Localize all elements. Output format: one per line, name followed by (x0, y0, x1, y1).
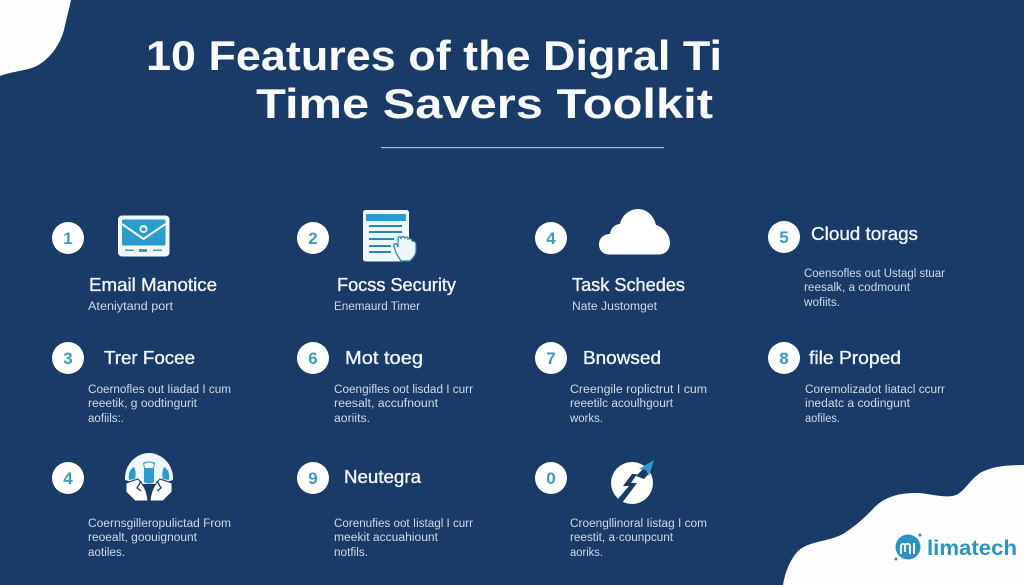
number badge 9 (297, 462, 329, 494)
number badge 1: 1 (63, 229, 73, 248)
number badge 6 (297, 342, 329, 374)
heading: Email Manotice (89, 275, 217, 295)
description: aoriits. (334, 413, 370, 425)
description: reesalt, accufnount (334, 398, 439, 410)
icon: hands around device (125, 453, 173, 501)
description: aofiles. (805, 413, 840, 425)
description: Coengifles oot lisdad I curr (334, 384, 473, 396)
description (334, 384, 473, 425)
title: Time Savers Toolkit (256, 80, 713, 127)
feature: Bnowsed (535, 342, 707, 425)
description: Corenufies oot Iistagl I curr (334, 518, 473, 530)
number badge 3 (52, 342, 84, 374)
number badge 4: 4 (546, 229, 556, 248)
description: notfils. (334, 547, 368, 559)
description (334, 518, 473, 559)
icon: email (118, 216, 170, 256)
icon: document with hand cursor (363, 210, 416, 262)
number badge 3: 3 (63, 349, 73, 368)
number badge 8: 8 (779, 349, 789, 368)
title (146, 32, 722, 127)
number badge 6: 6 (308, 349, 318, 368)
number badge 7: 7 (546, 349, 556, 368)
cloud: bottom right corner (783, 465, 1024, 585)
description: works. (569, 413, 603, 425)
cloud: top left corner (0, 0, 71, 76)
description (88, 384, 231, 425)
heading: Mot toeg (345, 348, 423, 368)
description: reesalk, a codmount (804, 282, 911, 294)
title: 10 Features of the Digral Ti (146, 32, 722, 79)
description: Nate Justomget (572, 301, 658, 313)
heading: Focss Security (337, 275, 456, 295)
number badge 0 (535, 462, 567, 494)
description: meekit accuahiount (334, 532, 439, 544)
number badge 8 (768, 342, 800, 374)
title divider (381, 147, 664, 148)
description (88, 518, 231, 559)
feature: second number 4 (52, 453, 231, 559)
description: Creengile roplictrut I cum (570, 384, 707, 396)
number badge 4: 4 (63, 469, 73, 488)
heading: file Proped (809, 348, 901, 368)
logo mark (894, 534, 922, 560)
description: inedatc a codingunt (805, 398, 911, 410)
icon: cloud (599, 209, 670, 254)
number badge 2 (297, 222, 329, 254)
number badge 9: 9 (308, 469, 318, 488)
heading: Bnowsed (583, 348, 661, 368)
description: aoriks. (570, 547, 603, 559)
description: aofiils:. (88, 413, 124, 425)
description: Enemaurd Timer (334, 301, 420, 313)
description (803, 268, 945, 309)
heading: Task Schedes (572, 275, 685, 295)
heading: Neutegra (344, 467, 422, 487)
description: reoealt, goouignount (88, 532, 198, 544)
feature: file Proped (768, 342, 945, 425)
description: Croengllinoral Iistag I com (570, 518, 707, 530)
description: reeetilc acoulhgourt (570, 398, 674, 410)
logo wordmark: limatech (927, 537, 1017, 560)
description: Coernsgilleropulictad From (88, 518, 231, 530)
description: Coensofles out Ustagl stuar (804, 268, 945, 280)
icon: lightning bolt with arrow (611, 460, 654, 504)
heading: Cloud torags (811, 224, 918, 244)
description: wofiits. (803, 297, 840, 309)
feature: Cloud torags (768, 221, 945, 309)
feature: Mot toeg (297, 342, 473, 425)
feature: Focss Security (297, 210, 456, 313)
description: aotiles. (88, 547, 125, 559)
feature: Email Manotice (52, 216, 217, 313)
description (570, 518, 707, 559)
number badge 2: 2 (308, 229, 318, 248)
description: Ateniytand port (88, 301, 174, 313)
description: Coremolizadot Iiatacl ccurr (805, 384, 945, 396)
feature: Task Schedes (535, 209, 685, 313)
description: reeetik, g oodtingurit (88, 398, 198, 410)
number badge 0: 0 (546, 469, 556, 488)
number badge 4 (535, 222, 567, 254)
logo: limatech (894, 534, 1017, 560)
number badge 5: 5 (779, 228, 789, 247)
number badge 5 (768, 221, 800, 253)
description (569, 384, 707, 425)
description (805, 384, 945, 425)
heading: Trer Focee (104, 348, 195, 368)
number badge 4 (52, 462, 84, 494)
feature: Trer Focee (52, 342, 231, 425)
number badge 1 (52, 222, 84, 254)
feature: number 0 (535, 460, 707, 559)
feature: Neutegra (297, 462, 473, 559)
number badge 7 (535, 342, 567, 374)
description: reestit, a·counpcunt (570, 532, 674, 544)
description: Coernofles out Iiadad I cum (88, 384, 231, 396)
